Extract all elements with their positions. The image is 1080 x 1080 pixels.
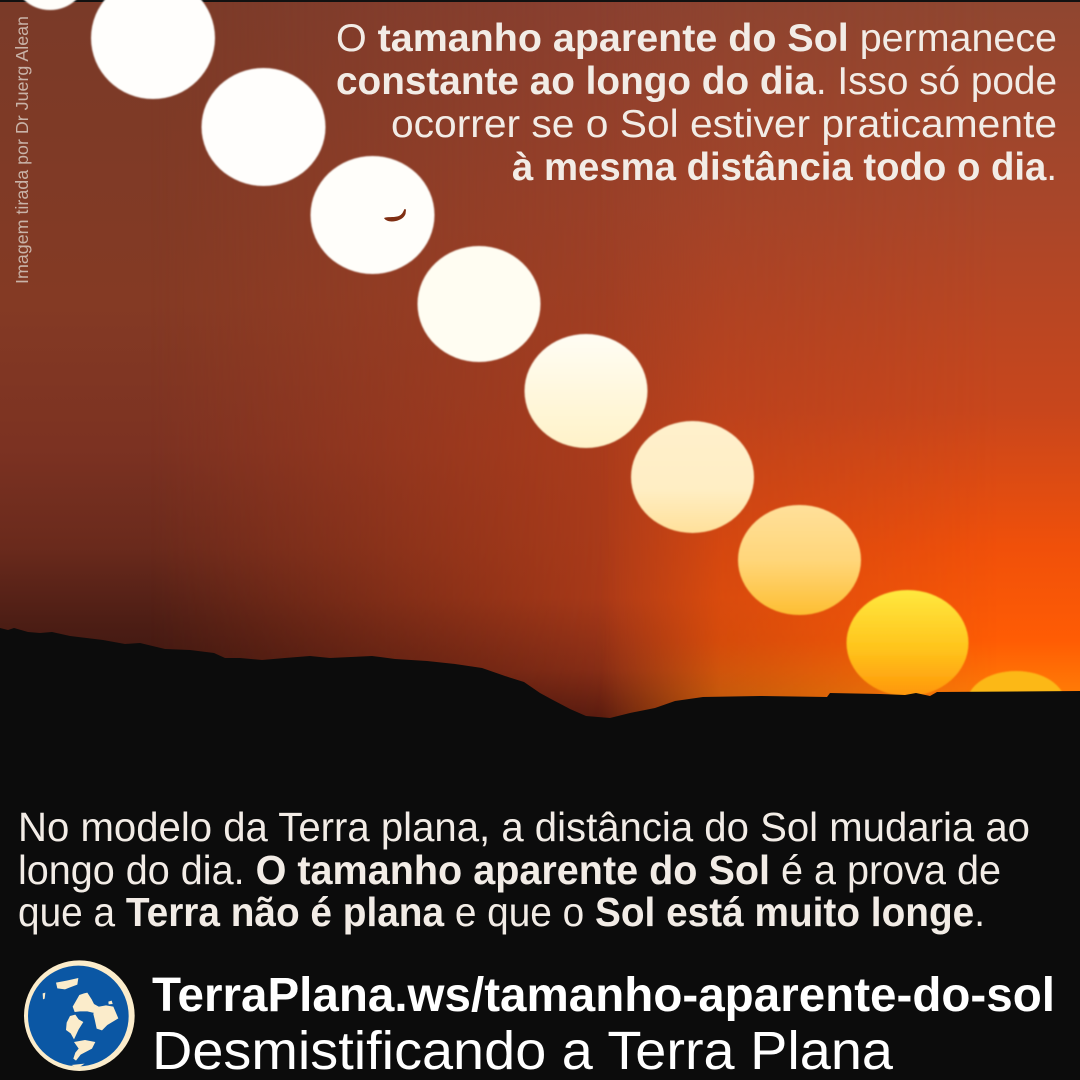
footer URL: TerraPlana.ws/tamanho-aparente-do-sol [152, 969, 1055, 1022]
sun 1 [13, 0, 87, 10]
line 1: No modelo da Terra plana, a distância do Sol mudaria ao [18, 804, 1030, 850]
bottom text block [18, 804, 1030, 935]
line 4: à mesma distância todo o dia. [512, 146, 1057, 189]
sun 6 [524, 334, 648, 448]
sun sequence [13, 0, 1065, 735]
icon: flat earth globe logo [24, 960, 135, 1071]
line 2: longo do dia. O tamanho aparente do Sol é a prova de [18, 847, 1001, 893]
sun 10 [967, 671, 1065, 735]
sun 7 [631, 421, 754, 533]
sun 4 [310, 156, 434, 274]
background: sunset sky [0, 0, 1080, 720]
line 3: ocorrer se o Sol estiver praticamente [391, 103, 1057, 146]
line 1: O tamanho aparente do Sol permanece [336, 17, 1057, 60]
footer tagline: Desmistificando a Terra Plana [152, 1021, 894, 1080]
line 2: constante ao longo do dia. Isso só pode [336, 60, 1057, 103]
line 3: que a Terra não é plana e que o Sol está muito longe. [18, 889, 985, 935]
sun 3 [202, 68, 326, 186]
bird silhouette on sun [384, 209, 406, 221]
sun 8 [738, 505, 861, 615]
image credit: Imagem tirada por Dr Juerg Alean [12, 16, 32, 284]
sun 5 [418, 246, 540, 362]
sun 2 [91, 0, 215, 99]
top text block [336, 17, 1057, 189]
landscape silhouette [0, 628, 1080, 1080]
sun 9 [846, 590, 968, 696]
